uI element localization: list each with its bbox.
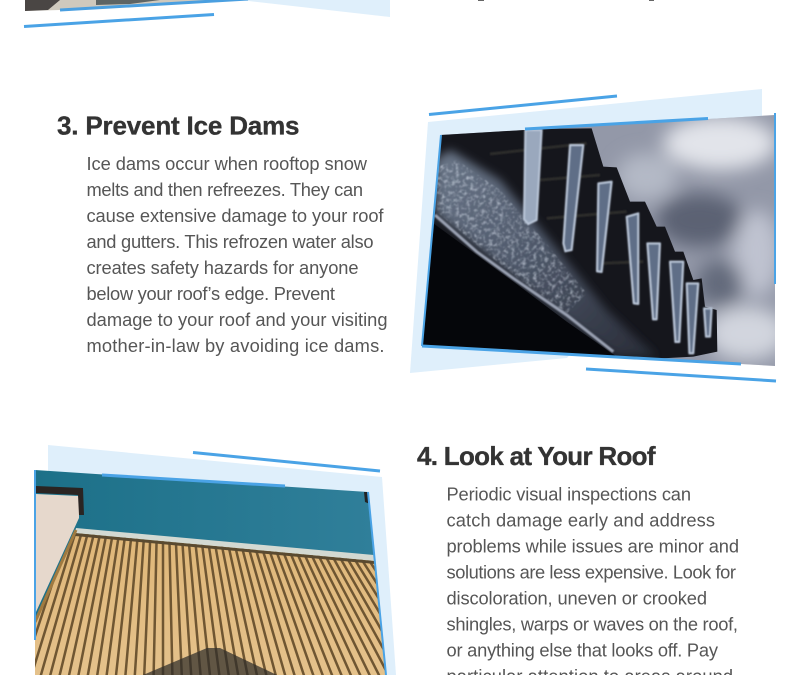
body text: ice dams: mother-in-law by avoiding ice dams.: [86, 335, 384, 356]
body text: visual inspections: [446, 484, 739, 675]
body text: visual inspections: discoloration, uneven or crooked: [446, 588, 707, 608]
corrugated sheet: [35, 533, 385, 675]
body text: visual inspections: solutions are less expensive. Look for: [446, 562, 736, 582]
body text: ice dams: below your roof’s edge. Prevent: [86, 283, 335, 304]
shadow line under edge: [75, 533, 375, 564]
section 3 text: [57, 110, 388, 356]
dark beam: [36, 486, 84, 515]
section 4 text: [417, 441, 739, 675]
body text: visual inspections: catch damage early and address: [446, 510, 715, 530]
diagonal roof side: [35, 530, 76, 622]
body text: visual inspections: problems while issues are minor and: [446, 536, 739, 556]
blue accent line top of photo: [525, 118, 708, 129]
previous text descender fragments: [478, 0, 654, 1]
blue accent line on photo: [60, 0, 248, 10]
light blue backing shape: [240, 0, 390, 17]
blue accent line below photo: [24, 14, 214, 26]
icicle photo: [417, 110, 787, 370]
dark eaves with teeth: [420, 128, 717, 360]
roof edge: [75, 528, 374, 561]
blue accent line left of photo: [34, 470, 36, 640]
black underside: [417, 223, 617, 357]
roof photo: [35, 470, 385, 675]
corner bracket: [364, 492, 368, 504]
blue accent line left of photo: [422, 135, 441, 346]
light blue backing shape: [410, 89, 762, 373]
blue accent line bottom of photo: [422, 346, 741, 364]
section 4 image: roof: [34, 445, 396, 675]
blue accent line above photo: [429, 96, 617, 114]
body text: ice dams: melts and then refreezes. They can: [86, 179, 363, 200]
blue accent line right of photo: [774, 113, 776, 284]
icicles: [524, 130, 712, 353]
wood slats: [490, 143, 643, 263]
body text: ice dams: and gutters. This refrozen water also: [86, 231, 374, 252]
blue accent line right of photo: [368, 492, 386, 675]
body text: ice dams: cause extensive damage to your roof: [86, 205, 384, 226]
previous section image fragment: [24, 0, 390, 26]
beam edge highlight: [435, 215, 613, 352]
light blue backing shape: [48, 445, 396, 675]
pale wall: [36, 494, 79, 612]
frosted beam: [435, 150, 657, 357]
blue accent line above photo: [193, 452, 380, 471]
section 3 image: icicles: [410, 89, 787, 381]
body text: visual inspections: or anything else that looks off. Pay: [446, 640, 719, 660]
body text: ice dams: Ice dams occur when rooftop snow: [86, 153, 368, 174]
heading: Look at Your Roof: 4. Look at Your Roof: [417, 441, 656, 471]
blue accent line top of photo: [102, 475, 285, 486]
body text: ice dams: [86, 153, 388, 356]
body text: visual inspections: shingles, warps or waves on the roof,: [446, 614, 738, 634]
body text: ice dams: damage to your roof and your visiting: [86, 309, 388, 330]
roof shadow: [143, 648, 277, 675]
body text: visual inspections: Periodic visual inspections can: [446, 484, 691, 504]
heading: Prevent Ice Dams: 3. Prevent Ice Dams: [57, 110, 300, 140]
photo sliver: [25, 0, 245, 11]
body text: ice dams: creates safety hazards for anyone: [86, 257, 358, 278]
blue accent line below photo: [586, 369, 776, 381]
